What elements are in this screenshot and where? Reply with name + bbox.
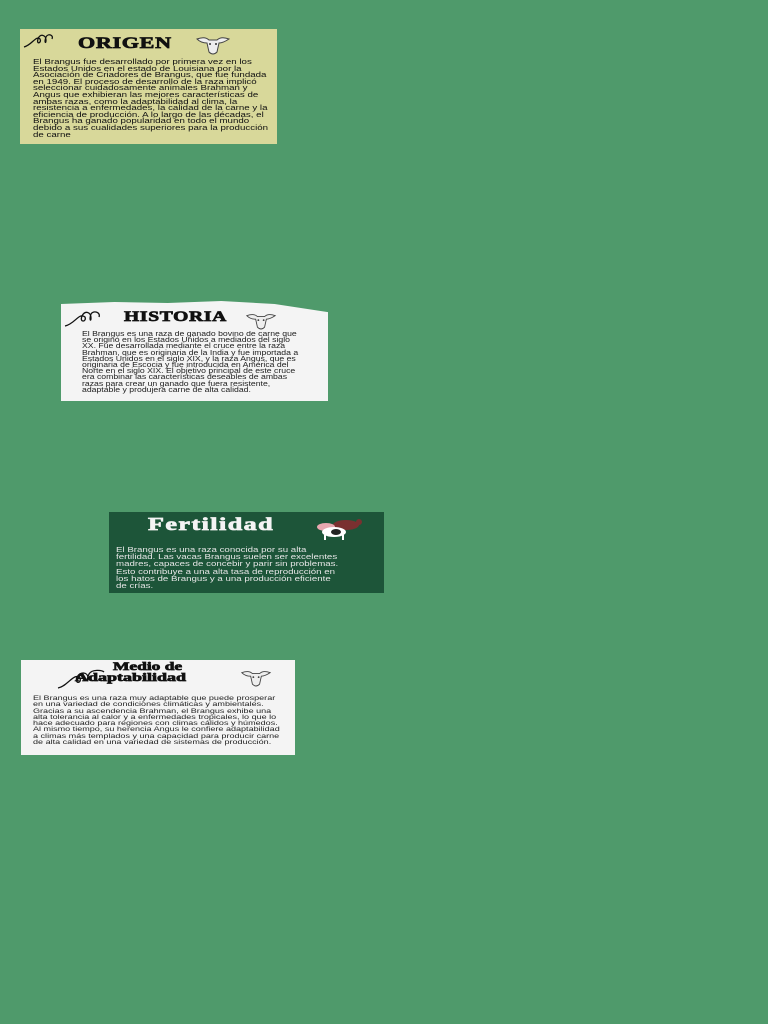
heading: Fertilidad xyxy=(148,514,274,534)
text block: alta tolerancia al calor y a enfermedades tropicales, lo que lo xyxy=(33,714,276,721)
text block: de carne xyxy=(33,130,71,139)
panel: fertilidad xyxy=(109,512,384,593)
icon: cow head xyxy=(246,314,276,330)
heading: line 1: Medio de xyxy=(113,659,182,673)
panel: medio de adaptabilidad xyxy=(21,660,295,755)
heading: HISTORIA xyxy=(124,309,227,325)
text block: debido a sus cualidades superiores para la producción xyxy=(33,123,268,132)
text block: hace adecuado para regiones con climas cálidos y húmedos. xyxy=(33,720,278,727)
text block: Esto contribuye a una alta tasa de reproducción en xyxy=(116,567,335,576)
text block xyxy=(82,331,298,394)
text block: Estados Unidos en el siglo XIX, y la raza Angus, que es xyxy=(82,356,296,363)
text block: eficiencia de producción. A lo largo de las décadas, el xyxy=(33,110,264,119)
text block xyxy=(33,695,280,746)
icon: cow head xyxy=(241,671,272,686)
heading: line 2: Adaptabilidad xyxy=(75,670,186,684)
text block: Al mismo tiempo, su herencia Angus le confiere adaptabilidad xyxy=(33,726,280,733)
text block: El Brangus es una raza conocida por su alta xyxy=(116,545,306,554)
text block: fertilidad. Las vacas Brangus suelen ser excelentes xyxy=(116,552,337,561)
text block: El Brangus es una raza muy adaptable que puede prosperar xyxy=(33,695,275,702)
text block: Asociación de Criadores de Brangus, que fue fundada xyxy=(33,70,266,79)
text block: Angus que exhibieran las mejores características de xyxy=(33,90,258,99)
text block xyxy=(116,545,338,590)
text block: XX. Fue desarrollada mediante el cruce entre la raza xyxy=(82,343,285,350)
text block: era combinar las características deseables de ambas xyxy=(82,374,287,381)
text block xyxy=(33,57,268,139)
text block: Brangus ha ganado popularidad en todo el mundo xyxy=(33,116,249,125)
text block: seleccionar cuidadosamente animales Brahman y xyxy=(33,83,248,92)
text block: originaria de Escocia y fue introducida en América del xyxy=(82,362,289,369)
icon: cows xyxy=(317,519,362,540)
text block: adaptable y produjera carne de alta calidad. xyxy=(82,387,251,394)
icon: swirl xyxy=(64,311,100,327)
text block: Brahman, que es originaria de la India y fue importada a xyxy=(82,350,298,357)
text block: resistencia a enfermedades, la calidad de la carne y la xyxy=(33,103,268,112)
text block: de alta calidad en una variedad de sistemas de producción. xyxy=(33,739,271,746)
text block: Estados Unidos en el estado de Louisiana por la xyxy=(33,64,242,73)
text block: los hatos de Brangus y a una producción eficiente xyxy=(116,574,331,583)
heading: ORIGEN xyxy=(78,35,172,52)
text block: Gracias a su ascendencia Brahman, el Brangus exhibe una xyxy=(33,708,271,715)
text block: de crías. xyxy=(116,581,153,590)
text block: en una variedad de condiciones climáticas y ambientales. xyxy=(33,701,264,708)
icon: swirl xyxy=(24,34,53,48)
icon: swirl xyxy=(58,670,104,689)
text block: Norte en el siglo XIX. El objetivo principal de este cruce xyxy=(82,368,295,375)
text block: ambas razas, como la adaptabilidad al clima, la xyxy=(33,97,237,106)
panel: historia xyxy=(61,300,328,401)
text block: El Brangus es una raza de ganado bovino de carne que xyxy=(82,331,297,338)
text block: madres, capaces de concebir y parir sin problemas. xyxy=(116,559,338,568)
panel: origen xyxy=(20,29,277,144)
text block: en 1949. El proceso de desarrollo de la raza implicó xyxy=(33,77,257,86)
text block: se originó en los Estados Unidos a mediados del siglo xyxy=(82,337,290,344)
icon: cow head xyxy=(196,37,230,54)
text block: a climas más templados y una capacidad para producir carne xyxy=(33,733,279,740)
text block: El Brangus fue desarrollado por primera vez en los xyxy=(33,57,252,66)
text block: razas para crear un ganado que fuera resistente, xyxy=(82,381,270,388)
